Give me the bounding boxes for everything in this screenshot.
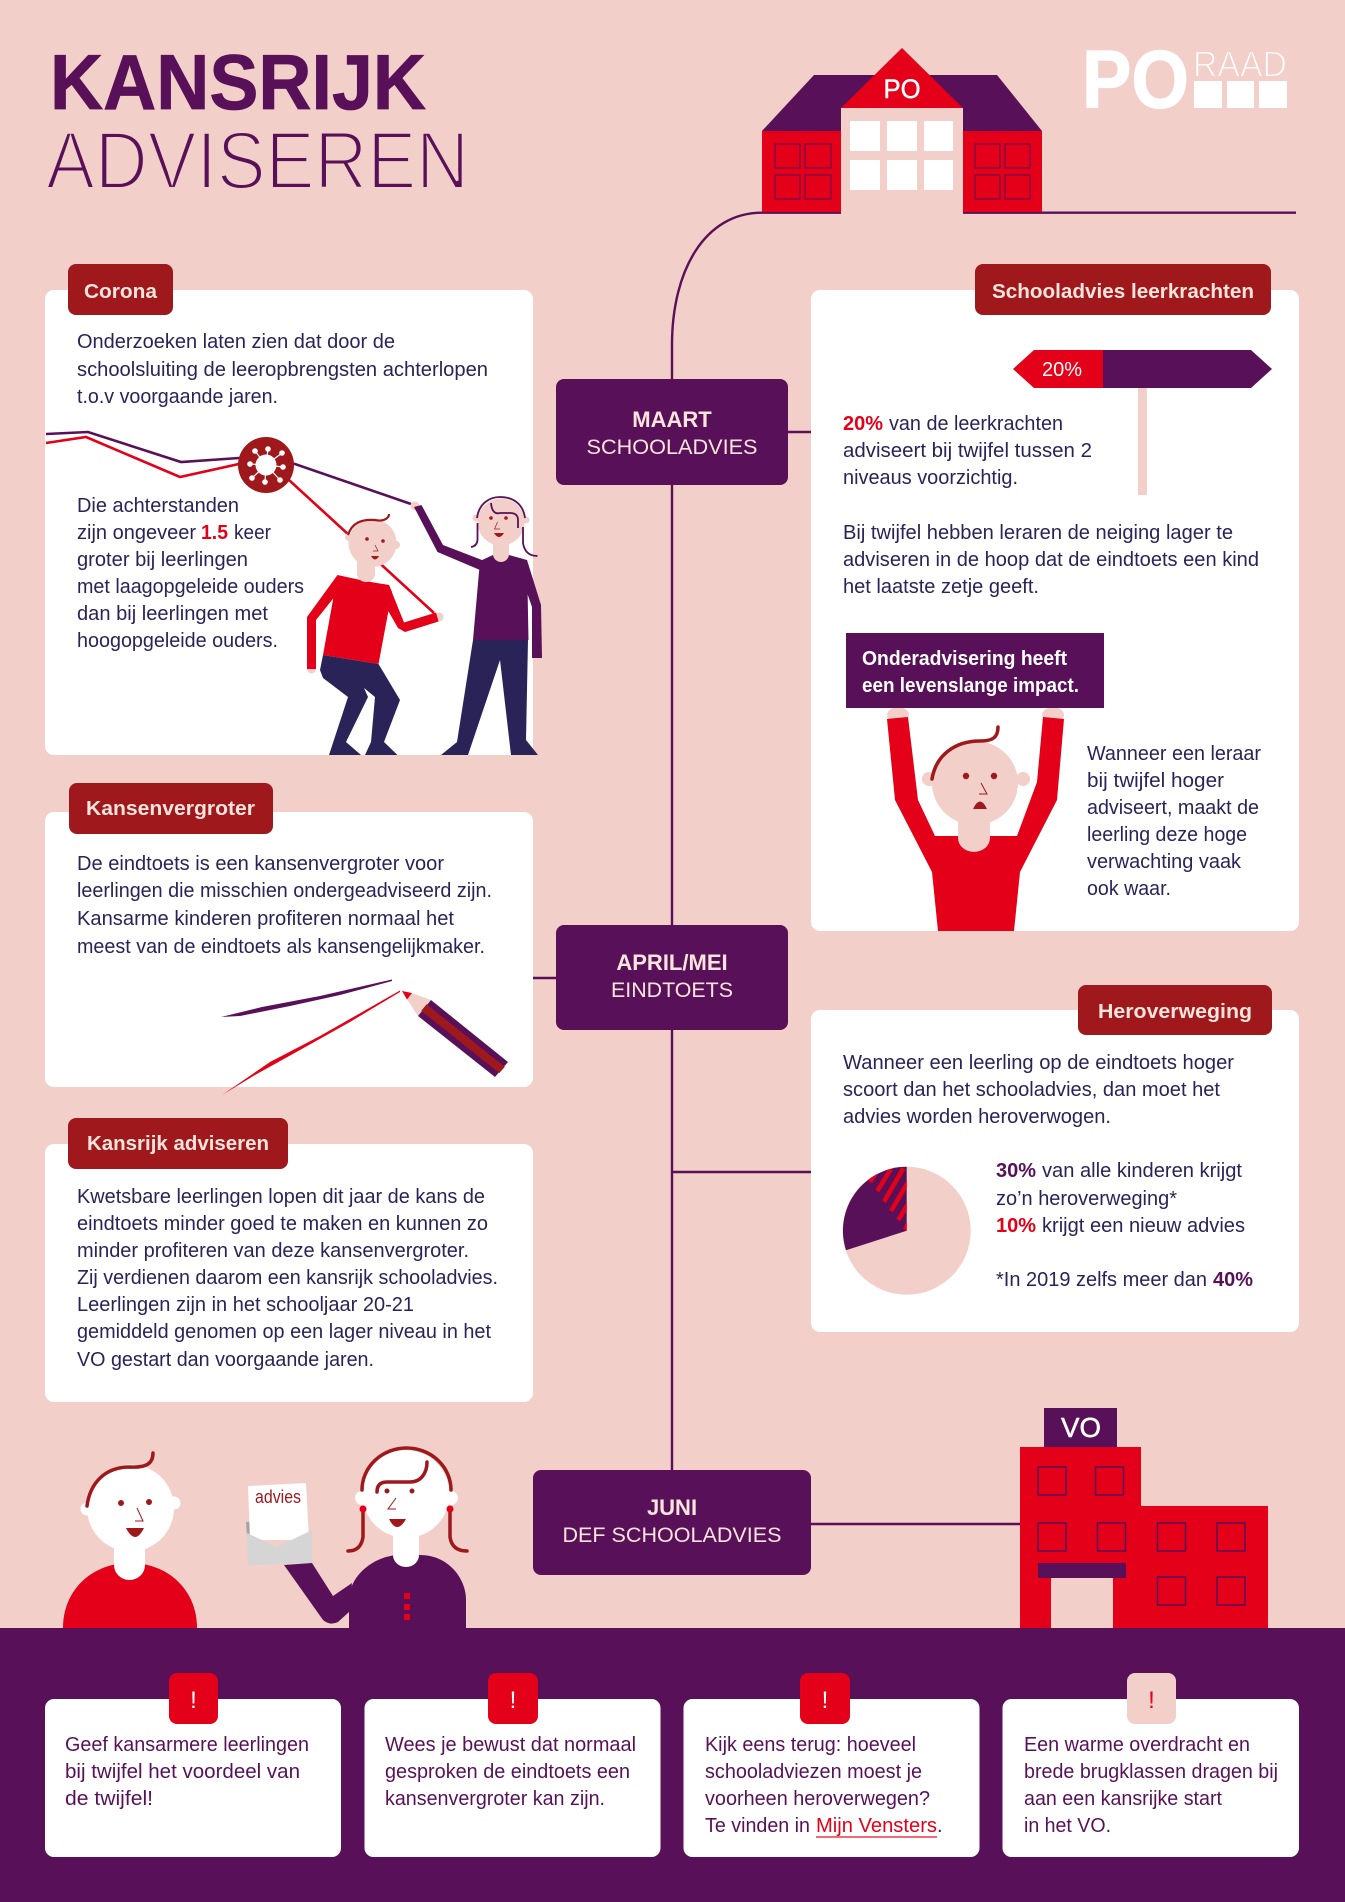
- icon: warning 2: [488, 1673, 538, 1724]
- text: pie legend: 40%: [1213, 1269, 1253, 1291]
- text: heroverweging: advies worden heroverwogen.: [843, 1106, 1111, 1128]
- text: wanneer een leraar: verwachting vaak: [1087, 851, 1242, 873]
- figure: boy pointing: [307, 514, 444, 755]
- icon: VO building: VO: [1061, 1412, 1101, 1443]
- icon: warning 2: !: [510, 1687, 516, 1714]
- icon: envelope with advies letter: [246, 1483, 312, 1565]
- tip card 4: brede brugklassen dragen bij: [1024, 1761, 1278, 1783]
- text: achterstanden: hoogopgeleide ouders.: [77, 630, 278, 652]
- text: kansrijk adviseren: eindtoets minder goed te maken en kunnen zo: [77, 1213, 488, 1235]
- text: pie legend: [996, 1160, 1253, 1291]
- tab: kansenvergroter: Kansenvergroter: [86, 798, 255, 820]
- tip card 3: .: [937, 1815, 943, 1837]
- text: 20% leerkrachten: 20%: [843, 413, 883, 435]
- tip card 4: in het VO.: [1024, 1815, 1111, 1837]
- text: wanneer een leraar: adviseert, maakt de: [1087, 797, 1259, 819]
- text: kansenvergroter: leerlingen die misschien ondergeadviseerd zijn.: [77, 880, 492, 902]
- tab: heroverweging: Heroverweging: [1098, 1001, 1252, 1023]
- tip card 4: aan een kansrijke start: [1024, 1788, 1222, 1810]
- box: juni def schooladvies: JUNI: [647, 1495, 697, 1520]
- text: bij twijfel: het laatste zetje geeft.: [843, 576, 1039, 598]
- text: kansrijk adviseren: gemiddeld genomen op een lager niveau in het: [77, 1321, 491, 1343]
- tip card 2: gesproken de eindtoets een: [385, 1761, 630, 1783]
- text: achterstanden: Die achterstanden: [77, 495, 239, 517]
- figure: smiling boy: [63, 1453, 197, 1628]
- tab: corona: [68, 264, 173, 315]
- text: wanneer een leraar: leerling deze hoge: [1087, 824, 1247, 846]
- panel: corona: [45, 264, 542, 755]
- pie chart: [843, 1167, 971, 1295]
- text: kansrijk adviseren: Kwetsbare leerlingen lopen dit jaar de kans de: [77, 1186, 485, 1208]
- text: achterstanden: met laagopgeleide ouders: [77, 576, 304, 598]
- figure: boy holding sign: [887, 707, 1064, 931]
- text: kansrijk adviseren: Zij verdienen daarom een kansrijk schooladvies.: [77, 1267, 498, 1289]
- text: pie legend: krijgt een nieuw advies: [1042, 1215, 1245, 1237]
- tab: kansrijk adviseren: Kansrijk adviseren: [87, 1133, 269, 1155]
- text: pie legend: 10%: [996, 1215, 1036, 1237]
- text: kansrijk adviseren: minder profiteren van deze kansenvergroter.: [77, 1240, 469, 1262]
- text: bij twijfel: adviseren in de hoop dat de eindtoets een kind: [843, 549, 1259, 571]
- text: bij twijfel: Bij twijfel hebben leraren de neiging lager te: [843, 522, 1233, 544]
- tip card 3: Kijk eens terug: hoeveel: [705, 1734, 916, 1756]
- text: kansenvergroter: De eindtoets is een kansenvergroter voor: [77, 853, 444, 875]
- text: achterstanden: zijn ongeveer: [77, 522, 196, 544]
- tip card 1: Geef kansarmere leerlingen: [65, 1734, 309, 1756]
- text: bij twijfel: [843, 522, 1259, 598]
- tab: kansrijk adviseren: [68, 1118, 288, 1169]
- tip card 3: Mijn Vensters: [816, 1815, 937, 1837]
- text: wanneer een leraar: [1087, 743, 1261, 900]
- panel: heroverweging: [811, 985, 1299, 1332]
- sign: onderadvisering: Onderadvisering heeft: [862, 648, 1067, 670]
- text: pie legend: zo’n heroverweging*: [996, 1188, 1177, 1210]
- tab: schooladvies leerkrachten: Schooladvies leerkrachten: [992, 281, 1254, 303]
- text: pie legend: 30%: [996, 1160, 1036, 1182]
- text: 20% leerkrachten: [843, 413, 1092, 489]
- icon: envelope with advies letter: advies: [255, 1487, 301, 1507]
- title: KANSRIJK: [50, 38, 426, 126]
- panel: kansenvergroter: [45, 783, 533, 1095]
- text: corona intro: schoolsluiting de leeropbrengsten achterlopen: [77, 359, 488, 381]
- box: maart schooladvies: MAART: [632, 407, 712, 432]
- text: wanneer een leraar: ook waar.: [1087, 878, 1171, 900]
- box: april/mei eindtoets: EINDTOETS: [611, 979, 733, 1002]
- tip card 2: kansenvergroter kan zijn.: [385, 1788, 605, 1810]
- tab: corona: Corona: [84, 281, 158, 303]
- logo: PO Raad: RAAD: [1193, 44, 1287, 84]
- text: pie legend: *In 2019 zelfs meer dan: [996, 1269, 1207, 1291]
- tip card 2: Wees je bewust dat normaal: [385, 1734, 636, 1756]
- text: 20% leerkrachten: niveaus voorzichtig.: [843, 467, 1018, 489]
- tab: heroverweging: [1078, 985, 1272, 1035]
- text: kansrijk adviseren: [77, 1186, 498, 1371]
- icon: signpost 20%: 20%: [1042, 359, 1082, 381]
- icon: warning 3: [800, 1673, 850, 1724]
- text: heroverweging: [843, 1052, 1234, 1128]
- tab: kansenvergroter: [69, 783, 273, 834]
- text: kansenvergroter: Kansarme kinderen profiteren normaal het: [77, 908, 454, 930]
- text: heroverweging: scoort dan het schooladvies, dan moet het: [843, 1079, 1220, 1101]
- text: achterstanden: keer: [234, 522, 271, 544]
- logo: PO Raad: PO: [1082, 34, 1189, 126]
- text: kansrijk adviseren: VO gestart dan voorgaande jaren.: [77, 1349, 374, 1371]
- tip card 1: [45, 1673, 341, 1857]
- box: juni def schooladvies: DEF SCHOOLADVIES: [562, 1524, 782, 1547]
- box: maart schooladvies: SCHOOLADVIES: [586, 436, 758, 459]
- text: achterstanden: 1.5: [201, 522, 228, 544]
- tip card 3: voorheen heroverwegen?: [705, 1788, 930, 1810]
- tip card 2: [364, 1673, 660, 1857]
- text: achterstanden: [77, 495, 304, 652]
- text: achterstanden: dan bij leerlingen met: [77, 603, 268, 625]
- sign: onderadvisering: [846, 633, 1104, 708]
- text: pie legend: van alle kinderen krijgt: [1042, 1160, 1242, 1182]
- figure: girl handing envelope: [284, 1448, 467, 1628]
- logo: PO Raad: [1082, 34, 1287, 126]
- line chart: [46, 432, 434, 613]
- text: achterstanden: groter bij leerlingen: [77, 549, 248, 571]
- text: 20% leerkrachten: van de leerkrachten: [889, 413, 1063, 435]
- tip card 4: [1002, 1673, 1299, 1857]
- icon: VO building: [1020, 1408, 1268, 1628]
- tip card 1: de twijfel!: [65, 1788, 153, 1810]
- panel: kansrijk adviseren: [45, 1118, 533, 1402]
- text: corona intro: [77, 331, 488, 408]
- box: maart schooladvies: [556, 379, 788, 485]
- timeline line: [533, 213, 1296, 1524]
- title: ADVISEREN: [46, 116, 469, 206]
- icon: warning 4: [1127, 1673, 1176, 1724]
- panel: schooladvies leerkrachten: [811, 264, 1299, 931]
- icon: PO school building: [762, 48, 1042, 214]
- icon: warning 4: !: [1148, 1687, 1155, 1714]
- icon: pencil scribbles: [221, 980, 508, 1095]
- tip card 3: Te vinden in: [705, 1815, 810, 1837]
- text: wanneer een leraar: Wanneer een leraar: [1087, 743, 1261, 765]
- title: [46, 38, 469, 206]
- text: kansrijk adviseren: Leerlingen zijn in het schooljaar 20-21: [77, 1294, 414, 1316]
- box: april/mei eindtoets: APRIL/MEI: [616, 950, 728, 975]
- icon: warning 1: !: [190, 1687, 197, 1714]
- text: kansenvergroter: meest van de eindtoets als kansengelijkmaker.: [77, 936, 485, 958]
- bottom band: [0, 1628, 1345, 1902]
- tip card 3: schooladviezen moest je: [705, 1761, 922, 1783]
- text: heroverweging: Wanneer een leerling op de eindtoets hoger: [843, 1052, 1234, 1074]
- icon: signpost 20%: [1013, 350, 1272, 495]
- text: corona intro: t.o.v voorgaande jaren.: [77, 386, 278, 408]
- text: 20% leerkrachten: adviseert bij twijfel tussen 2: [843, 440, 1092, 462]
- icon: warning 3: !: [822, 1687, 828, 1714]
- tip card 4: Een warme overdracht en: [1024, 1734, 1250, 1756]
- box: juni def schooladvies: [533, 1470, 811, 1575]
- text: kansenvergroter: [77, 853, 492, 958]
- icon: warning 1: [169, 1673, 218, 1724]
- figure: girl pointing: [410, 497, 542, 755]
- icon: virus: [238, 437, 294, 493]
- box: april/mei eindtoets: [556, 925, 788, 1030]
- text: wanneer een leraar: bij twijfel hoger: [1087, 770, 1224, 792]
- tip card 1: bij twijfel het voordeel van: [65, 1761, 300, 1783]
- text: corona intro: Onderzoeken laten zien dat door de: [77, 331, 395, 353]
- sign: onderadvisering: een levenslange impact.: [862, 675, 1079, 697]
- tab: schooladvies leerkrachten: [975, 264, 1271, 315]
- tip card 3: [684, 1673, 980, 1857]
- icon: PO school building: PO: [884, 74, 920, 104]
